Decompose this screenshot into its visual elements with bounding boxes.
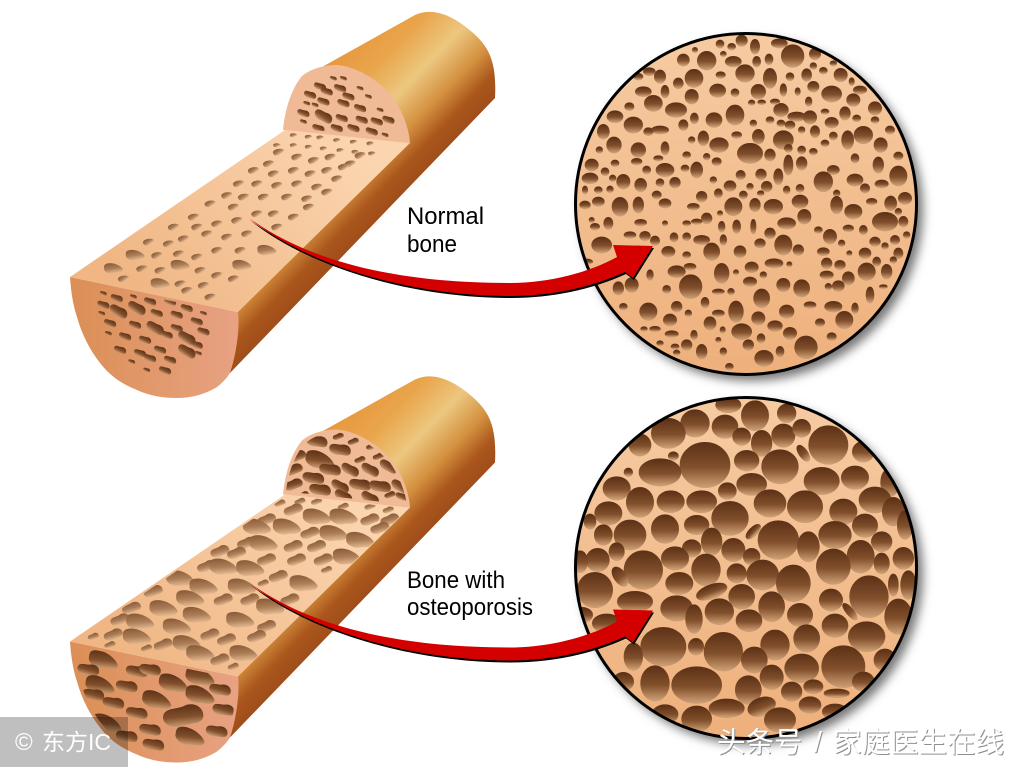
label: Normal bone: bone	[407, 231, 457, 258]
magnified osteoporotic bone circle	[572, 398, 923, 745]
watermark: publisher credit: 头条号	[717, 727, 803, 759]
watermark: publisher credit	[717, 727, 1005, 760]
watermark: publisher credit: 头条号	[718, 728, 804, 760]
magnified normal bone circle	[576, 34, 923, 381]
watermark: agency credit	[0, 717, 128, 767]
watermark: publisher credit: 家庭医生在线	[834, 728, 1005, 760]
watermark: publisher credit: /	[814, 727, 822, 759]
label: Normal bone: Normal	[407, 203, 484, 230]
normal bone cutaway illustration	[70, 12, 495, 398]
arrow: normal bone to magnified view	[249, 218, 654, 298]
osteoporotic bone cutaway illustration	[70, 376, 495, 762]
watermark: agency credit: ©	[15, 729, 33, 756]
panel: normal bone	[70, 12, 923, 398]
watermark: publisher credit: /	[815, 728, 823, 760]
arrow: osteoporotic bone to magnified view	[249, 582, 654, 662]
panel: bone with osteoporosis	[70, 376, 923, 762]
watermark: publisher credit: 家庭医生在线	[833, 727, 1004, 759]
watermark: agency credit: 东方IC	[42, 729, 111, 755]
label: Normal bone	[407, 203, 484, 258]
label: Bone with osteoporosis: osteoporosis	[407, 594, 533, 621]
label: Bone with osteoporosis: Bone with	[407, 567, 505, 594]
label: Bone with osteoporosis	[407, 567, 533, 621]
